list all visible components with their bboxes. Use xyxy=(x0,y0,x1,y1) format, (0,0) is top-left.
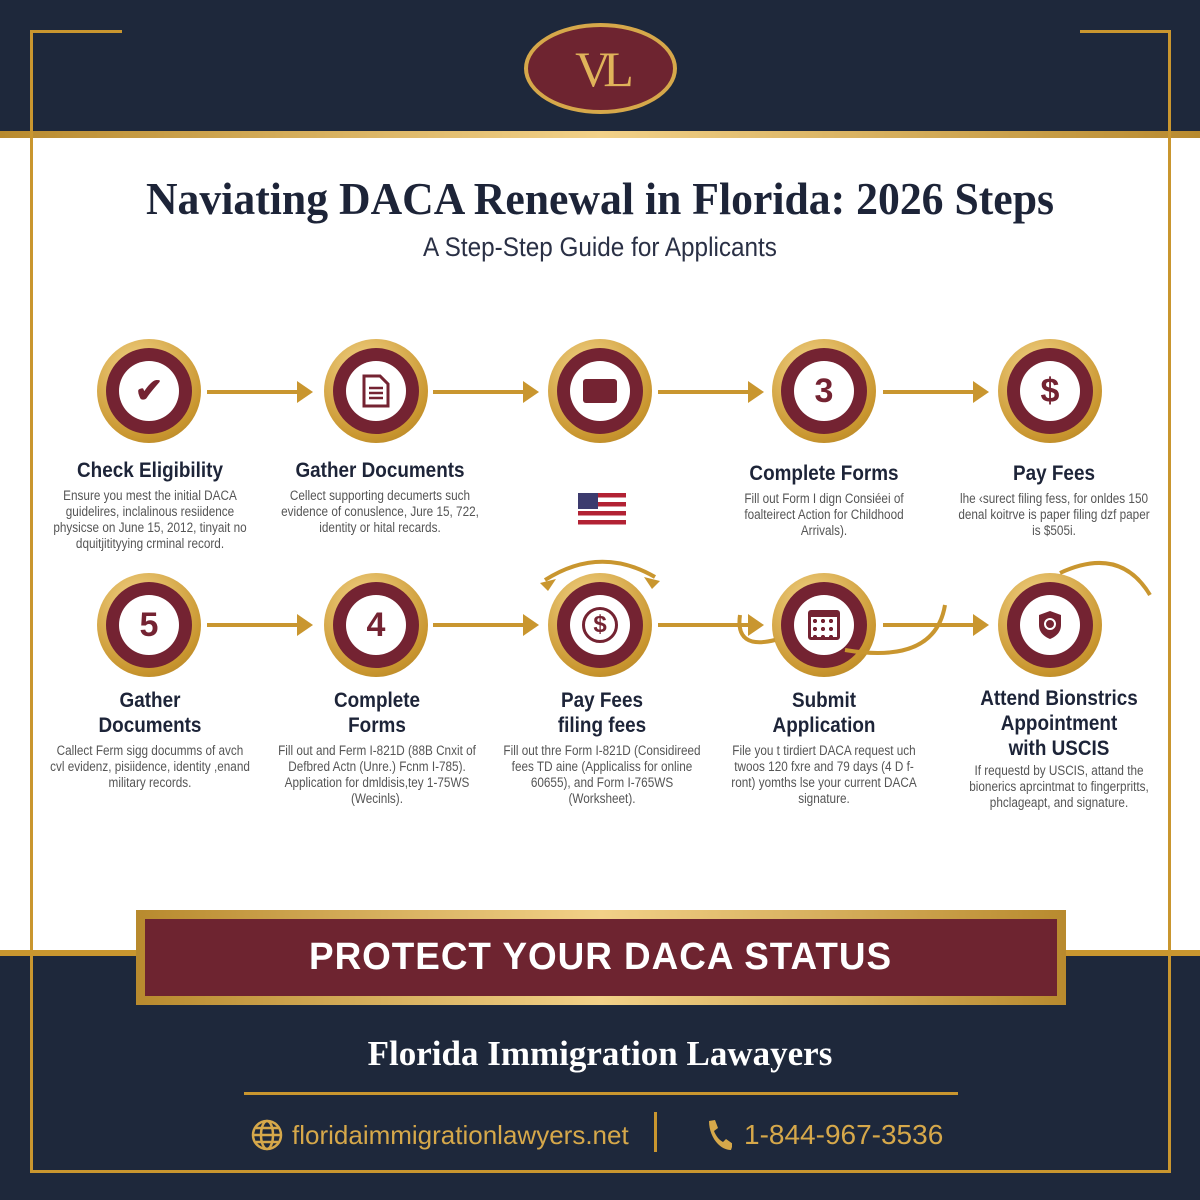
step: Submit Application: File you t tirdiert DACA request uch twoos 120 fxre and 79 days (4 D f-ront) yomths lse your current DACA signature. xyxy=(731,743,917,806)
icon: check: ✔ xyxy=(135,372,163,410)
icon: 4 xyxy=(324,573,428,677)
icon: coin xyxy=(548,573,652,677)
step: Submit Application: Submit xyxy=(792,689,856,712)
step: Check Eligibility: Ensure you mest the initial DACA guidelires, inclalinous resiidence physicse on June 15, 2012, tinyait no dquitjitityying crminal record. xyxy=(53,488,247,551)
arrow xyxy=(433,623,525,627)
step: Submit Application xyxy=(731,689,917,806)
phone: 1-844-967-3536 xyxy=(744,1119,943,1150)
title: Naviating DACA Renewal in Florida: 2026 Steps xyxy=(146,173,1054,224)
logo xyxy=(524,23,677,114)
steps row 1 xyxy=(97,339,1102,524)
icon: dollar: $ xyxy=(1041,372,1059,410)
step: Attend Biometrics: If requestd by USCIS, attand the bionerics aprcintmat to fingerpritts, phclageapt, and signature. xyxy=(969,763,1149,810)
step: Check Eligibility: Check Eligibility xyxy=(77,459,223,482)
icon: briefcase xyxy=(548,339,652,443)
icon: dollar xyxy=(998,339,1102,443)
step: Complete Forms 2: Complete xyxy=(334,689,420,712)
curved arrows xyxy=(540,560,1152,655)
arrow xyxy=(658,390,750,394)
step: Complete Forms: Fill out Form I dign Consiéei of foalteirect Action for Childhood Arrivals). xyxy=(744,491,904,538)
step: Submit Application: Application xyxy=(773,714,875,737)
icon: document xyxy=(324,339,428,443)
arrow xyxy=(207,623,299,627)
step: Attend Biometrics: Appointment xyxy=(1001,712,1117,735)
steps row 2 xyxy=(97,560,1152,677)
step: Check Eligibility xyxy=(53,459,247,551)
step: Pay Fees xyxy=(958,462,1150,538)
step: Attend Biometrics xyxy=(969,687,1149,810)
step: Gather Documents 2: Gather xyxy=(120,689,180,712)
step: Complete Forms 2 xyxy=(278,689,476,806)
step: Gather Documents 2 xyxy=(50,689,250,790)
step: Pay Fees 2: Pay Fees xyxy=(561,689,643,712)
step: Pay Fees: lhe ‹surect filing fess, for onldes 150 denal koitrve is paper filing dzf paper is $505i. xyxy=(958,491,1150,538)
arrow xyxy=(207,390,299,394)
step: Complete Forms 2: Fill out and Ferm I-821D (88B Cnxit of Defbred Actn (Unre.) Fcnm I-785). Application for dmldisis,tey 1-75WS (Wecinls). xyxy=(278,743,476,806)
step: Complete Forms: Complete Forms xyxy=(749,462,899,485)
logo: VL xyxy=(575,40,626,96)
top navy header xyxy=(0,0,1200,133)
divider xyxy=(244,1092,958,1095)
icon: 3 xyxy=(772,339,876,443)
step: Pay Fees: Pay Fees xyxy=(1013,462,1095,485)
subtitle: A Step-Step Guide for Applicants xyxy=(423,232,777,262)
step: Gather Documents: Cellect supporting decumerts such evidence of conuslence, Jure 15, 722, identity or hital recards. xyxy=(281,488,479,535)
icon: 5: 5 xyxy=(140,606,158,644)
step: Gather Documents 2: Callect Ferm sigg documms of avch cvl evidenz, pisiidence, identity ,enand military records. xyxy=(50,743,250,790)
step: Pay Fees 2: Fill out thre Form I-821D (Considireed fees TD aine (Applicaliss for online 60655), and Form I-765WS (Worksheet). xyxy=(503,743,701,806)
step: Gather Documents: Gather Documents xyxy=(295,459,465,482)
icon: 3: 3 xyxy=(815,372,833,410)
icon: check xyxy=(97,339,201,443)
website: floridaimmigrationlawyers.net xyxy=(292,1120,629,1150)
step: Pay Fees 2: filing fees xyxy=(558,714,646,737)
arrow xyxy=(883,390,975,394)
icon: coin: $ xyxy=(593,611,607,638)
step: Complete Forms xyxy=(744,462,904,538)
step: Attend Biometrics: Attend Bionstrics xyxy=(980,687,1138,710)
contact xyxy=(252,1112,943,1152)
banner xyxy=(136,910,1066,1005)
icon: calendar xyxy=(772,573,876,677)
icon: 4: 4 xyxy=(367,606,385,644)
icon: shield xyxy=(998,573,1102,677)
step: Complete Forms 2: Forms xyxy=(348,714,406,737)
bottom navy footer xyxy=(0,950,1200,1200)
banner: PROTECT YOUR DACA STATUS xyxy=(309,936,893,978)
firm name: Florida Immigration Lawayers xyxy=(368,1034,832,1073)
step: Gather Documents xyxy=(281,459,479,535)
gold band xyxy=(0,131,1200,138)
step: Pay Fees 2 xyxy=(503,689,701,806)
arrow xyxy=(658,623,750,627)
step: Gather Documents 2: Documents xyxy=(99,714,201,737)
icon: flag xyxy=(578,493,626,525)
arrow xyxy=(433,390,525,394)
step: Attend Biometrics: with USCIS xyxy=(1009,737,1109,760)
icon: 5 xyxy=(97,573,201,677)
arrow xyxy=(883,623,975,627)
